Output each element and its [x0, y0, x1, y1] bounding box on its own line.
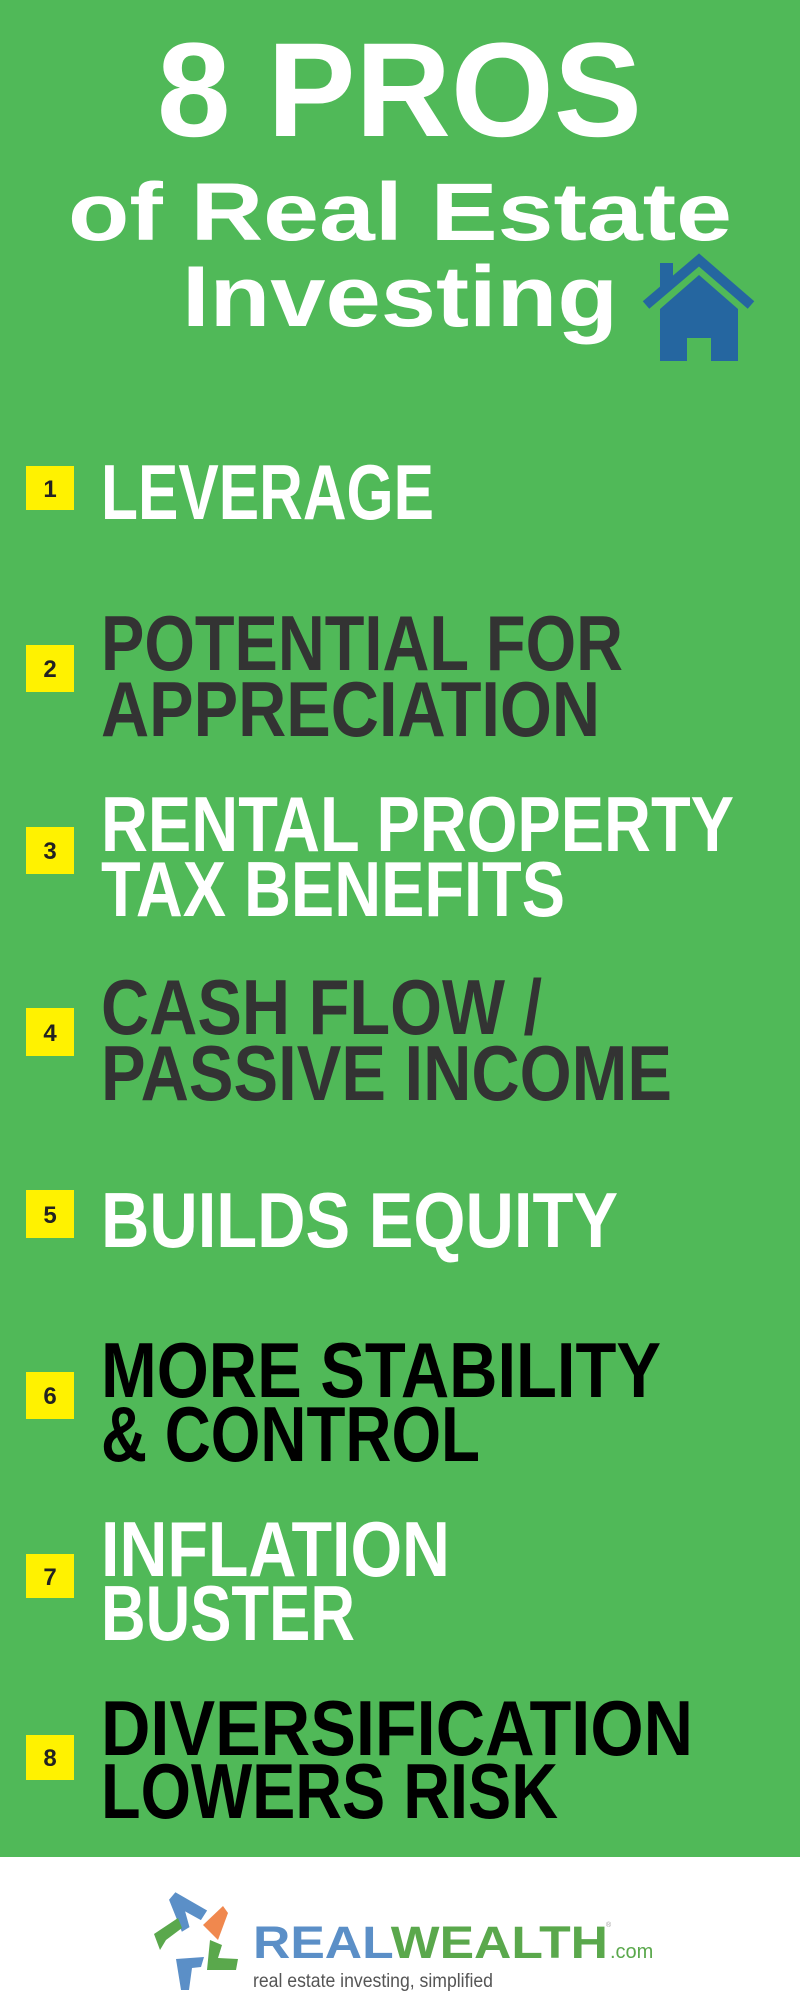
item 3: [26, 780, 734, 933]
item 4: PASSIVE INCOME: [101, 1029, 672, 1117]
item 6: [26, 1326, 661, 1478]
item 3: 3: [43, 838, 57, 865]
title: 8 PROS: [157, 16, 642, 165]
item 4: [26, 963, 672, 1117]
item 3: TAX BENEFITS: [101, 845, 565, 933]
item 7: BUSTER: [101, 1569, 355, 1657]
item 5: 5: [43, 1202, 57, 1229]
tagline: real estate investing, simplified: [253, 1971, 493, 1992]
item 2: 2: [43, 656, 57, 683]
footer logo: [154, 1890, 653, 1992]
title: of Real Estate: [68, 167, 732, 258]
icon: house: [646, 260, 751, 361]
item 6: 6: [43, 1383, 57, 1410]
item 7: [26, 1505, 450, 1657]
icon: logo pinwheel: [154, 1890, 238, 1990]
item 1: [26, 448, 434, 536]
item 7: 7: [43, 1564, 57, 1591]
item 2: POTENTIAL FOR: [101, 599, 623, 687]
item 5: BUILDS EQUITY: [101, 1176, 618, 1264]
item 8: LOWERS RISK: [101, 1747, 558, 1835]
item 1: 1: [43, 476, 57, 503]
item 6: & CONTROL: [101, 1390, 480, 1478]
footer logo: .com: [610, 1941, 653, 1963]
title: [68, 16, 732, 345]
item 8: DIVERSIFICATION: [101, 1684, 693, 1772]
item 7: INFLATION: [101, 1505, 450, 1593]
logo wordmark: REAL WEALTH: [253, 1917, 608, 1968]
item 2: [26, 599, 623, 753]
footer logo: ®: [606, 1921, 612, 1929]
item 4: CASH FLOW /: [101, 963, 542, 1051]
item 2: APPRECIATION: [101, 665, 600, 753]
item 8: [26, 1684, 693, 1835]
item 8: 8: [43, 1745, 57, 1772]
title: Investing: [182, 249, 618, 345]
item 1: LEVERAGE: [101, 448, 434, 536]
item 4: 4: [43, 1020, 57, 1047]
item 6: MORE STABILITY: [101, 1326, 661, 1414]
